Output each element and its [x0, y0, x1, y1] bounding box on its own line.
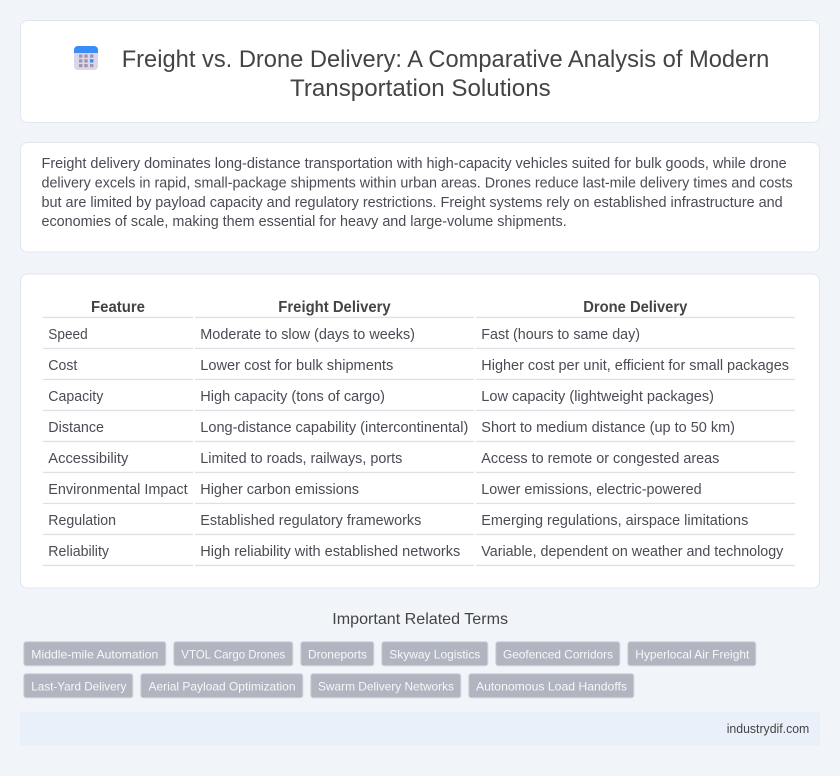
footer	[20, 712, 820, 746]
row: capacity	[43, 389, 795, 411]
row: capacity: Low capacity (lightweight packages)	[481, 389, 714, 405]
summary text: Freight delivery dominates long-distance transportation with high-capacity vehicles suited for bulk goods, while drone	[42, 156, 787, 172]
row: distance: Short to medium distance (up to 50 km)	[481, 420, 735, 436]
row: reliability: Reliability	[48, 544, 110, 560]
tag: hyperlocal air freight	[628, 642, 756, 666]
row: accessibility: Limited to roads, railways, ports	[200, 451, 402, 467]
row: environmental impact: Higher carbon emissions	[200, 482, 359, 498]
title: Freight vs. Drone Delivery: A Comparative Analysis of Modern	[122, 46, 769, 73]
row: reliability	[43, 544, 795, 566]
row: regulation: Emerging regulations, airspace limitations	[481, 513, 748, 529]
row: regulation: Established regulatory frameworks	[200, 513, 421, 529]
tag: middle-mile automation: Middle-mile Automation	[31, 647, 158, 661]
tag: droneports: Droneports	[308, 647, 367, 661]
summary text: but are limited by payload capacity and regulatory restrictions. Freight systems rely on established infrastructure and	[42, 195, 783, 211]
heading: important related terms: Important Related Terms	[332, 611, 508, 628]
tag list	[24, 642, 756, 698]
summary text: economies of scale, making them essential for heavy and large-volume shipments.	[42, 214, 567, 230]
row: distance: Long-distance capability (intercontinental)	[200, 420, 468, 436]
tag: vtol cargo drones	[174, 642, 293, 666]
tag: droneports	[301, 642, 374, 666]
row: accessibility: Access to remote or congested areas	[481, 451, 719, 467]
row: cost: Cost	[48, 358, 77, 374]
tag: swarm delivery networks	[311, 674, 461, 698]
footer: industrydif.com	[727, 721, 809, 736]
tag: last-yard delivery: Last-Yard Delivery	[31, 679, 126, 693]
row: regulation: Regulation	[48, 513, 116, 529]
row: accessibility	[43, 451, 795, 473]
tag: middle-mile automation	[24, 642, 166, 666]
panel: summary	[20, 142, 820, 252]
tag: last-yard delivery	[24, 674, 133, 698]
row: distance	[43, 420, 795, 442]
title	[122, 46, 769, 102]
row: speed	[43, 327, 795, 349]
table header row: Freight Delivery	[278, 299, 391, 316]
tag: hyperlocal air freight: Hyperlocal Air Freight	[635, 647, 750, 661]
tag: autonomous load handoffs	[469, 674, 634, 698]
tag: geofenced corridors: Geofenced Corridors	[503, 647, 613, 661]
row: capacity: Capacity	[48, 389, 104, 405]
row: environmental impact: Lower emissions, electric-powered	[481, 482, 702, 498]
row: capacity: High capacity (tons of cargo)	[200, 389, 385, 405]
summary text	[42, 156, 793, 230]
row: regulation	[43, 513, 795, 535]
row: environmental impact	[43, 482, 795, 504]
row: speed: Moderate to slow (days to weeks)	[200, 327, 415, 343]
tag: aerial payload optimization	[141, 674, 303, 698]
tag: geofenced corridors	[496, 642, 620, 666]
row: cost: Higher cost per unit, efficient for small packages	[481, 358, 789, 374]
tag: autonomous load handoffs: Autonomous Load Handoffs	[476, 679, 627, 693]
row: speed: Fast (hours to same day)	[481, 327, 640, 343]
title: Transportation Solutions	[290, 75, 551, 102]
row: speed: Speed	[48, 327, 88, 343]
tag: swarm delivery networks: Swarm Delivery Networks	[318, 679, 454, 693]
tag: skyway logistics: Skyway Logistics	[389, 647, 480, 661]
row: accessibility: Accessibility	[48, 451, 129, 467]
row: reliability: Variable, dependent on weather and technology	[481, 544, 784, 560]
tag: vtol cargo drones: VTOL Cargo Drones	[181, 647, 285, 661]
row: cost	[43, 358, 795, 380]
tag: skyway logistics	[382, 642, 488, 666]
table header row: Drone Delivery	[583, 299, 687, 316]
panel: header	[20, 20, 820, 122]
row: distance: Distance	[48, 420, 104, 436]
table header row	[43, 299, 795, 318]
summary text: delivery excels in rapid, small-package shipments within urban areas. Drones reduce last-mile delivery times and costs	[42, 175, 793, 191]
row: reliability: High reliability with established networks	[200, 544, 460, 560]
row: cost: Lower cost for bulk shipments	[200, 358, 393, 374]
icon: calendar	[74, 46, 98, 70]
panel: comparison table	[20, 274, 820, 588]
row: environmental impact: Environmental Impact	[48, 482, 188, 498]
tag: aerial payload optimization: Aerial Payload Optimization	[148, 679, 296, 693]
table header row: Feature	[91, 299, 145, 316]
